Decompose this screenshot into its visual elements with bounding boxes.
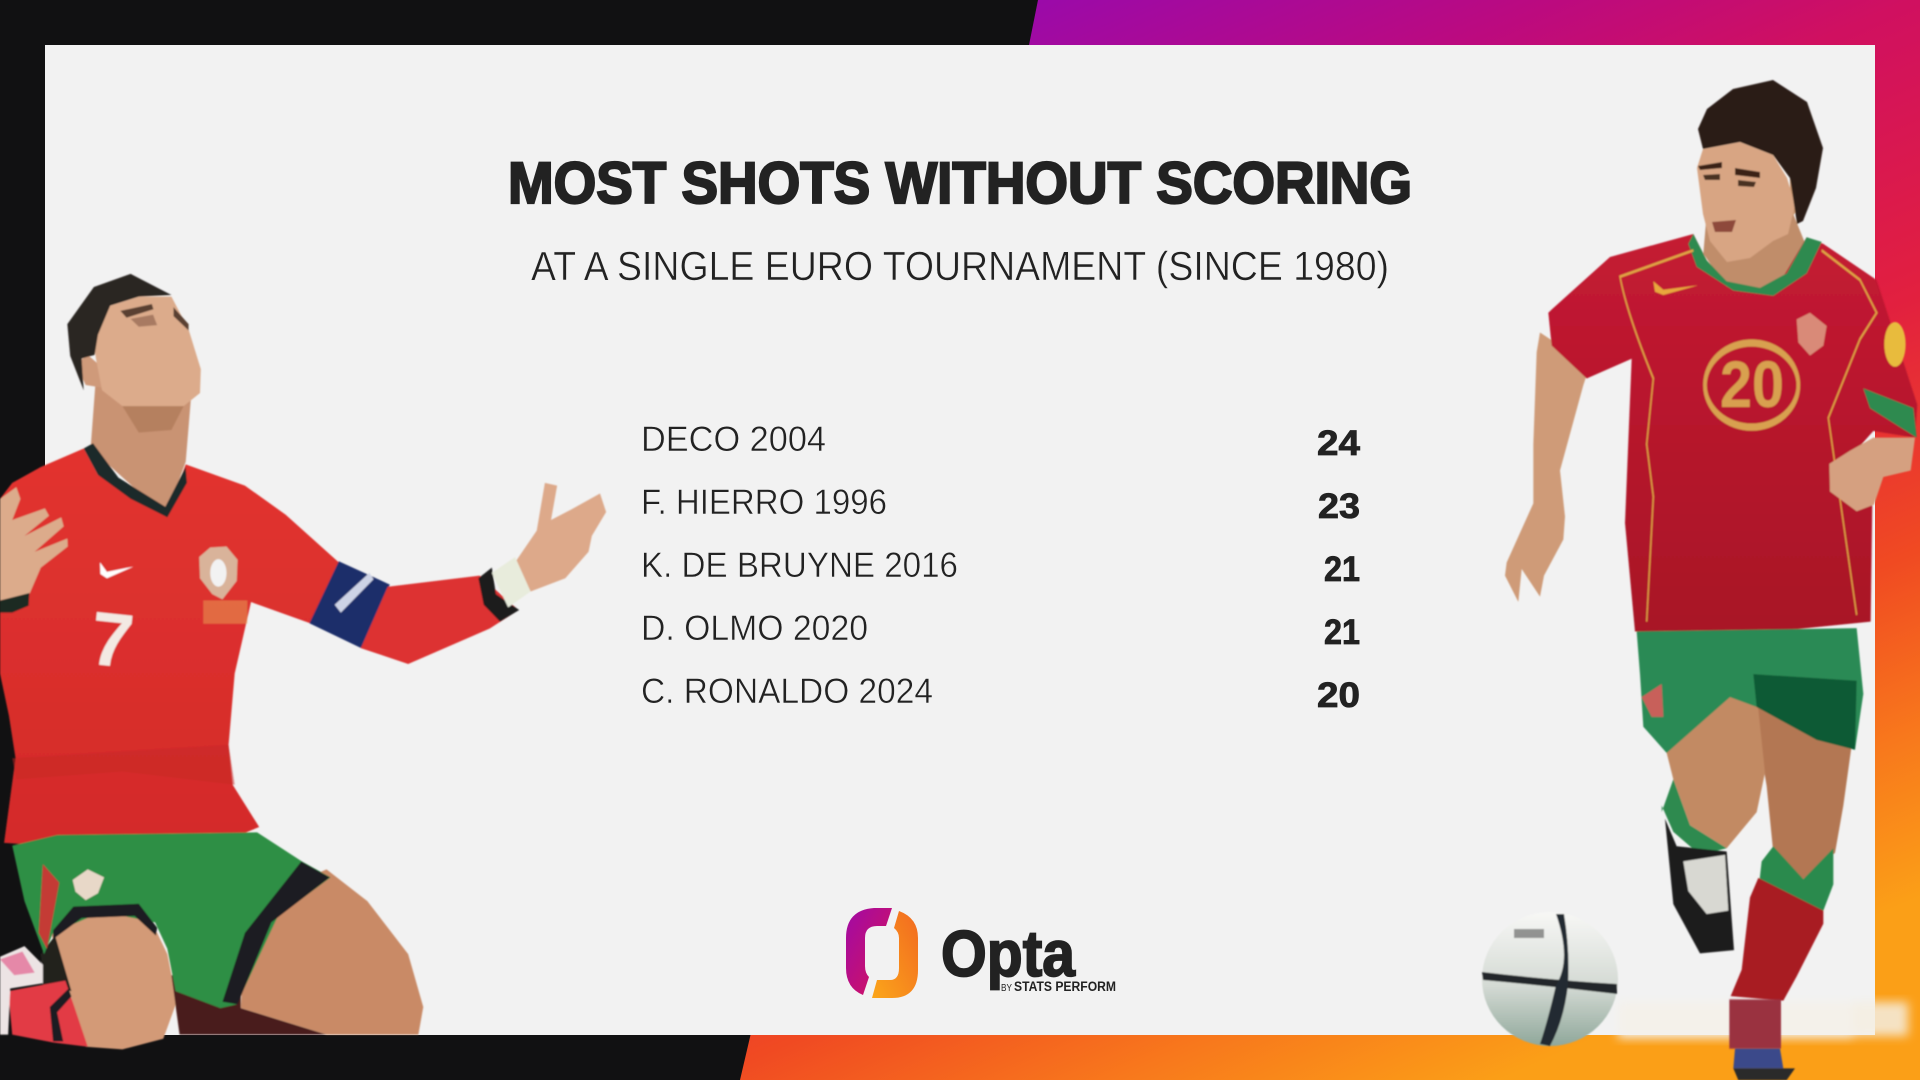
row: Deco name: DECO 2004	[641, 420, 826, 459]
shorts shade	[1753, 674, 1857, 750]
lower foot	[1733, 1049, 1783, 1068]
forearm sleeve	[361, 576, 518, 664]
hand right	[515, 483, 606, 591]
right arm	[1829, 438, 1915, 511]
right thigh	[241, 869, 423, 1035]
brow right	[173, 307, 189, 330]
swoosh	[100, 562, 133, 578]
right thigh	[1750, 687, 1853, 879]
photo: Deco running	[1505, 80, 1917, 1080]
left thigh	[51, 909, 177, 1049]
sleeve badge	[1884, 322, 1906, 367]
right gradient band	[1860, 0, 1920, 1080]
row: Hierro value: 23	[1318, 487, 1360, 526]
shorts hem left	[53, 904, 157, 939]
neck	[1703, 214, 1807, 294]
face	[1697, 142, 1795, 262]
logo byline small: BY	[1001, 983, 1012, 994]
red sock	[1731, 878, 1823, 1001]
shorts	[1637, 628, 1863, 753]
crest	[199, 546, 238, 599]
shorts side stripe	[39, 864, 59, 949]
ball brand mark	[1514, 929, 1544, 938]
sleeve stripe	[1863, 388, 1917, 438]
subtitle: AT A SINGLE EURO TOURNAMENT (SINCE 1980)	[531, 243, 1389, 289]
row: De Bruyne name: K. DE BRUYNE 2016	[641, 546, 958, 585]
shorts crest	[73, 869, 104, 900]
logo wordmark: Opta	[941, 917, 1076, 990]
face	[92, 297, 201, 411]
eyes	[1703, 174, 1756, 187]
crest	[1797, 313, 1827, 356]
row: De Bruyne value: 21	[1324, 550, 1360, 589]
jersey number 7: 7	[86, 596, 137, 685]
row: Deco value: 24	[1317, 424, 1361, 463]
ball body	[1482, 912, 1618, 1046]
boot bottom	[1733, 1068, 1795, 1080]
ear	[1790, 178, 1805, 220]
hair	[1698, 80, 1823, 224]
ranking table	[641, 420, 1361, 715]
crest shield	[210, 559, 227, 587]
row: Ronaldo value: 20	[1317, 676, 1360, 715]
red shirt	[1548, 234, 1917, 631]
green sock left	[1662, 779, 1727, 855]
left cuff	[0, 593, 29, 613]
sponsor text block	[203, 600, 247, 624]
photo: football	[1482, 912, 1618, 1046]
mouth	[1712, 220, 1736, 232]
left thigh	[1663, 687, 1765, 848]
shirt fold shade	[12, 745, 235, 785]
shoe	[0, 946, 43, 1035]
gold piping	[1620, 250, 1877, 622]
blurred lower leg	[1729, 999, 1781, 1049]
shoe accent	[0, 951, 35, 975]
left arm	[1505, 333, 1590, 602]
row: Ronaldo name: C. RONALDO 2024	[641, 672, 933, 711]
logo byline: STATS PERFORM	[1014, 979, 1116, 994]
sock	[8, 981, 88, 1047]
wrist tape	[492, 557, 531, 607]
bottom gradient band	[740, 1020, 1920, 1080]
Opta logo	[846, 908, 1116, 998]
boot	[1665, 819, 1734, 953]
eye shade	[131, 315, 157, 327]
chin shade	[122, 406, 184, 433]
dark gap by boot	[41, 936, 71, 991]
photo: Ronaldo kneeling	[0, 274, 606, 1049]
shorts	[12, 832, 331, 1008]
hand left	[0, 487, 68, 600]
collar	[1688, 234, 1822, 296]
green sock right	[1758, 846, 1833, 912]
brow left	[120, 304, 153, 318]
ear	[76, 355, 104, 388]
icon: logo mark	[846, 908, 918, 998]
row: Hierro name: F. HIERRO 1996	[641, 483, 887, 522]
brows	[1698, 162, 1760, 178]
neck	[91, 377, 192, 512]
boot white panel	[1683, 855, 1728, 914]
armband stripe	[335, 573, 373, 613]
row: Olmo value: 21	[1324, 613, 1360, 652]
title: MOST SHOTS WITHOUT SCORING	[508, 151, 1412, 216]
number circle	[1705, 343, 1798, 427]
armband	[309, 561, 390, 648]
shorts hem right	[222, 861, 330, 1004]
collar	[84, 443, 187, 517]
jersey number 20: 20	[1720, 347, 1784, 421]
ball vertical band	[1540, 914, 1568, 1046]
shadow under	[171, 975, 327, 1035]
row: Olmo name: D. OLMO 2020	[641, 609, 868, 648]
shorts crest	[1642, 684, 1663, 717]
red shirt torso	[0, 449, 339, 855]
cuff	[478, 568, 519, 622]
ball horizontal band	[1482, 972, 1617, 994]
top gradient band	[1026, 0, 1920, 60]
sock band	[50, 989, 71, 1041]
chest swoosh	[1653, 281, 1698, 295]
white smudge behind feet	[1618, 1002, 1908, 1038]
hair	[67, 274, 171, 390]
